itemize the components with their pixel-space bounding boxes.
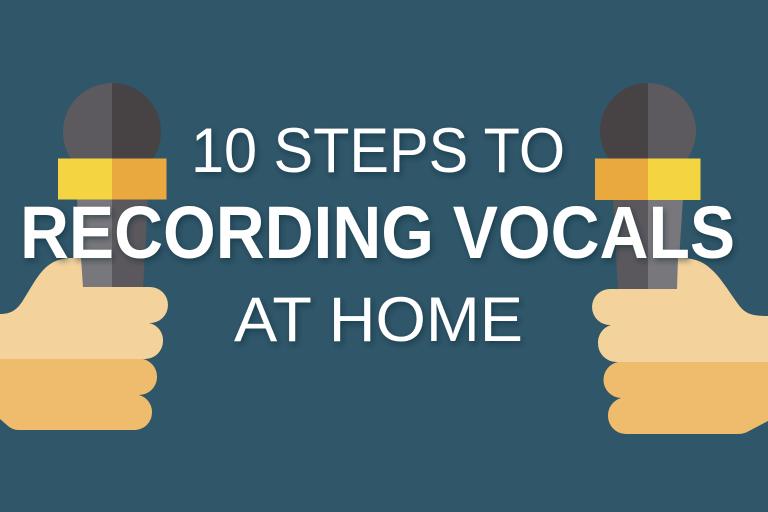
left hand lower fingers (0, 359, 157, 430)
left microphone handle (77, 199, 148, 290)
title line: at home: AT HOME (234, 285, 523, 355)
left microphone yellow band (58, 158, 166, 200)
right microphone yellow band (595, 158, 700, 200)
right hand upper fingers and thumb (592, 258, 768, 362)
icon: left hand holding microphone (0, 83, 168, 430)
right microphone handle (613, 199, 683, 290)
icon: right hand holding microphone (592, 83, 768, 434)
right microphone head (600, 83, 696, 179)
title line: 10 steps to: 10 STEPS TO (191, 116, 565, 186)
right hand lower fingers (603, 362, 768, 434)
left microphone head (63, 83, 161, 181)
title (20, 116, 735, 355)
left hand upper fingers and thumb (0, 258, 168, 359)
